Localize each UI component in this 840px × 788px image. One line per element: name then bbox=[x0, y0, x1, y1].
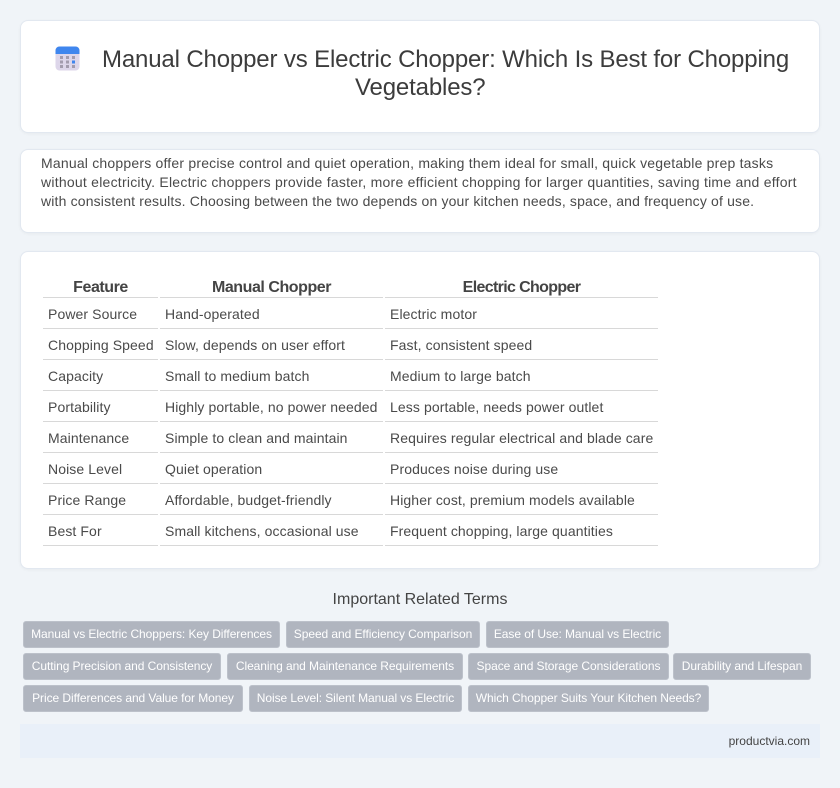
tag bbox=[23, 685, 243, 712]
panel: comparison table: Less portable, needs power outlet bbox=[390, 399, 603, 415]
tag bbox=[227, 653, 463, 680]
panel: comparison table: Fast, consistent speed bbox=[390, 337, 532, 353]
panel: comparison table: Highly portable, no power needed bbox=[165, 399, 378, 415]
header: feature: Feature bbox=[73, 279, 128, 296]
tag: Cutting Precision and Consistency bbox=[32, 659, 212, 673]
panel: comparison table: Small kitchens, occasional use bbox=[165, 523, 359, 539]
footer bar bbox=[20, 724, 820, 758]
tag bbox=[286, 621, 480, 648]
row: price range: Price Range bbox=[48, 492, 126, 508]
header: manual chopper: Manual Chopper bbox=[212, 279, 331, 296]
panel: comparison table bbox=[20, 251, 820, 569]
panel: introduction bbox=[20, 149, 820, 233]
row: portability: Portability bbox=[48, 399, 111, 415]
panel: comparison table: Small to medium batch bbox=[165, 368, 310, 384]
tag: Cleaning and Maintenance Requirements bbox=[236, 659, 454, 673]
intro line 3: with consistent results. Choosing between the two depends on your kitchen needs, space, and frequency of use. bbox=[41, 193, 754, 209]
tag: Noise Level: Silent Manual vs Electric bbox=[257, 691, 454, 705]
title card bbox=[20, 20, 820, 133]
panel: comparison table: Requires regular electrical and blade care bbox=[390, 430, 653, 446]
intro line 1: Manual choppers offer precise control and quiet operation, making them ideal for small, quick vegetable prep tasks bbox=[41, 155, 773, 171]
tag bbox=[249, 685, 462, 712]
row: noise level: Noise Level bbox=[48, 461, 122, 477]
tag group: related terms bbox=[23, 621, 811, 712]
title line 1: Manual Chopper vs Electric Chopper: Which Is Best for Chopping bbox=[102, 46, 789, 73]
row: power source: Power Source bbox=[48, 306, 137, 322]
panel: comparison table: Simple to clean and maintain bbox=[165, 430, 348, 446]
panel: comparison table: Produces noise during use bbox=[390, 461, 558, 477]
tag: Manual vs Electric Choppers: Key Differences bbox=[31, 627, 272, 641]
tag: Which Chopper Suits Your Kitchen Needs? bbox=[476, 691, 701, 705]
icon: calendar grid bbox=[56, 46, 80, 70]
footer source text: productvia.com bbox=[729, 734, 810, 748]
row: capacity: Capacity bbox=[48, 368, 103, 384]
intro line 2: without electricity. Electric choppers provide faster, more efficient chopping for larger quantities, saving time and effort bbox=[41, 174, 797, 190]
panel: comparison table: Affordable, budget-friendly bbox=[165, 492, 332, 508]
tag bbox=[468, 685, 709, 712]
row: maintenance: Maintenance bbox=[48, 430, 129, 446]
panel: comparison table: Hand-operated bbox=[165, 306, 260, 322]
panel: comparison table: Slow, depends on user effort bbox=[165, 337, 345, 353]
tag: Speed and Efficiency Comparison bbox=[294, 627, 472, 641]
tag: Price Differences and Value for Money bbox=[32, 691, 234, 705]
panel: comparison table: Quiet operation bbox=[165, 461, 262, 477]
tag bbox=[486, 621, 669, 648]
row: chopping speed: Chopping Speed bbox=[48, 337, 154, 353]
tag bbox=[23, 621, 280, 648]
panel: comparison table: Frequent chopping, large quantities bbox=[390, 523, 613, 539]
panel: comparison table: Medium to large batch bbox=[390, 368, 531, 384]
tag bbox=[673, 653, 811, 680]
tag: Ease of Use: Manual vs Electric bbox=[494, 627, 661, 641]
title line 2: Vegetables? bbox=[355, 74, 485, 101]
row: best for: Best For bbox=[48, 523, 102, 539]
tag bbox=[23, 653, 221, 680]
tag: Durability and Lifespan bbox=[682, 659, 802, 673]
panel: comparison table: Higher cost, premium models available bbox=[390, 492, 635, 508]
panel: comparison table: Electric motor bbox=[390, 306, 477, 322]
tag: Space and Storage Considerations bbox=[477, 659, 660, 673]
heading: important related terms: Important Related Terms bbox=[333, 591, 507, 608]
header: electric chopper: Electric Chopper bbox=[463, 279, 580, 296]
tag bbox=[468, 653, 669, 680]
